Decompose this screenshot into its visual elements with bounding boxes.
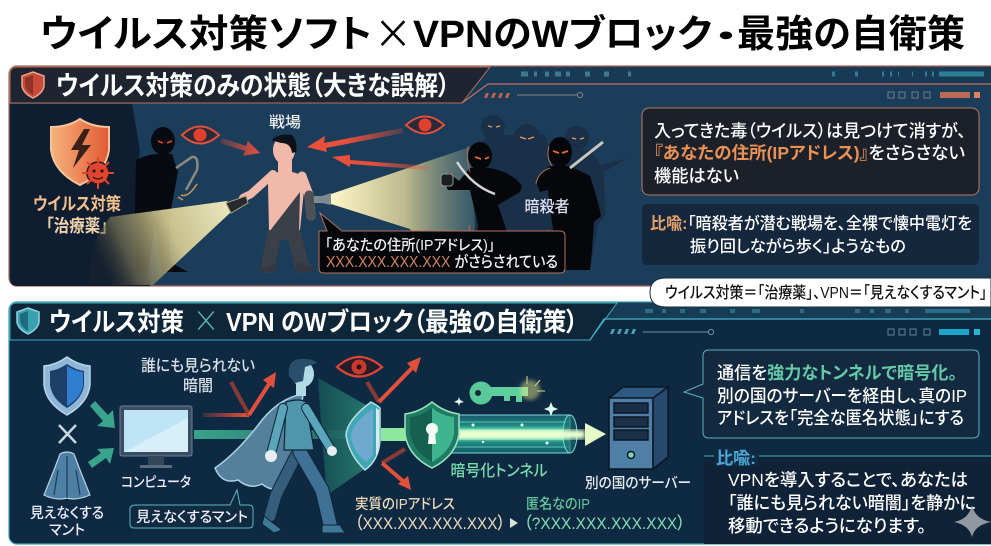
label: antivirus remedy: ウイルス対策: [33, 194, 121, 214]
flashlight left: [226, 196, 248, 213]
label: cloak callout: [130, 490, 253, 528]
text box: encryption: 別の国のサーバーを経由し、真のIP: [717, 386, 967, 406]
panel: antivirus plus VPN: [9, 297, 991, 544]
icon: keyhole shield: [405, 402, 459, 468]
panel: antivirus only: [9, 66, 991, 286]
arrows: inputs to computer: [88, 401, 115, 468]
flashlight right: [314, 193, 331, 205]
panel heading: ウイルス対策: [49, 307, 184, 337]
label: computer: コンピュータ: [121, 474, 191, 490]
icon: antivirus shield: [51, 119, 114, 189]
text box: what antivirus lacks: 『あなたの住所(IPアドレス)』をさらさない: [654, 143, 965, 163]
flashlight beam right: [331, 147, 478, 270]
text box: VPN metaphor: 「誰にも見られない暗闇」を静かに: [728, 493, 976, 513]
icon: small triangle arrow: [510, 518, 518, 528]
label: antivirus remedy: 「治療薬」: [46, 216, 108, 236]
assassin group: silhouettes: [441, 115, 628, 270]
panel heading: ×: [193, 297, 219, 341]
callout: exposed address: [319, 213, 565, 273]
icon: green key: [454, 376, 558, 416]
label: unseen darkness: 誰にも見られない: [141, 357, 255, 375]
label: encrypted tunnel: 暗号化トンネル: [450, 462, 548, 480]
panel heading: VPN のWブロック（最強の自衛策）: [226, 307, 578, 337]
panel heading: ウイルス対策のみの状態（大きな誤解）: [56, 71, 450, 101]
icon: sparkle: [954, 505, 991, 537]
label: cloak callout: 見えなくするマント: [136, 509, 248, 526]
icon: header shield: [17, 308, 39, 334]
icon: red eye right: [406, 116, 444, 134]
icon: header shield: [22, 72, 44, 98]
label: real IP address: [355, 495, 505, 533]
connection bar: [194, 430, 384, 439]
arrow: eye to person: [220, 138, 260, 156]
person: walking with cape: [262, 359, 345, 533]
text box: encryption: アドレスを「完全な匿名状態」にする: [717, 408, 964, 428]
label: anonymous IP: [524, 496, 685, 533]
text box: what antivirus lacks: [642, 108, 979, 195]
header decoration: [484, 74, 984, 98]
text box: what antivirus lacks: 入ってきた毒（ウイルス）は見つけて消すが、: [654, 121, 966, 141]
header strip: [10, 303, 991, 340]
label: unseen darkness: [141, 357, 255, 395]
icon: red eye left: [182, 126, 219, 144]
header strip: [10, 67, 991, 103]
main title: ×: [374, 2, 412, 60]
label: anonymous IP: （?XXX.XXX.XXX.XXX）: [524, 514, 685, 533]
icon: blue shield: [44, 357, 90, 415]
icon: computer: [120, 406, 192, 468]
text box: VPN metaphor: [704, 446, 991, 544]
icon: cloak: [44, 452, 90, 499]
label: unseen darkness: 暗闇: [183, 377, 213, 395]
label: antivirus remedy: [33, 194, 121, 236]
label: invisibility cloak: 見えなくする: [30, 505, 104, 522]
text box: encryption: 通信を強力なトンネルで暗号化。: [717, 363, 957, 383]
panel heading: [49, 297, 578, 341]
summary pill: [650, 278, 991, 307]
icon: red eye: [337, 357, 382, 376]
icon: cross symbol: [59, 425, 76, 443]
label: anonymous IP: 匿名なのIP: [526, 496, 590, 513]
label: real IP address: （XXX.XXX.XXX.XXX）: [355, 514, 505, 533]
main title: ウイルス対策ソフト: [40, 14, 372, 56]
arrow: red deflected top: [367, 357, 421, 402]
text box: VPN metaphor: VPNを導入することで、あなたは: [728, 470, 968, 490]
main title: 最強の自衛策: [737, 14, 965, 56]
text box: VPN metaphor: 移動できるようになります。: [728, 516, 926, 536]
label: invisibility cloak: マント: [49, 523, 85, 539]
text box: VPN metaphor: 比喩:: [716, 449, 756, 468]
text box: encryption: [684, 350, 979, 438]
green shield cone: [318, 378, 366, 495]
text box: metaphor: 振り回しながら歩く」ようなもの: [690, 236, 906, 256]
label: foreign server: 別の国のサーバー: [585, 475, 691, 492]
arrows: threats converging: [307, 128, 428, 170]
icon: translucent shield: [346, 402, 380, 470]
main title: [40, 2, 965, 60]
flashlight beam left: [89, 201, 231, 285]
icon: server: [609, 387, 668, 469]
text box: metaphor: [642, 204, 979, 265]
panel background: [9, 66, 991, 286]
main title: ・: [714, 12, 738, 56]
label: real IP address: 実質のIPアドレス: [355, 495, 455, 513]
panel background: [9, 302, 991, 544]
callout: exposed address: XXX.XXX.XXX.XXX がさらされている: [326, 252, 558, 271]
arrow: red deflected bottom: [382, 449, 411, 490]
cape: [215, 394, 303, 489]
header rule: [590, 319, 991, 340]
main title: VPNのWブロック: [413, 13, 712, 56]
text box: metaphor: 比喩:「暗殺者が潜む戦場を、全裸で懐中電灯を: [650, 213, 972, 233]
text box: what antivirus lacks: 機能はない: [654, 166, 739, 186]
dark left backdrop: [10, 104, 150, 286]
person: exposed body: [243, 135, 314, 272]
label: invisibility cloak: [30, 505, 104, 539]
header tab: [10, 67, 490, 103]
label: assassins: 暗殺者: [524, 198, 570, 216]
label: battlefield: 戦場: [269, 114, 301, 131]
arrow: red deflected left: [203, 372, 276, 417]
header tab: [10, 303, 617, 340]
header decoration: [610, 311, 980, 335]
assassin: left silhouette: [135, 127, 197, 272]
header rule: [462, 84, 991, 103]
callout: exposed address: 「あなたの住所(IPアドレス)」: [325, 237, 495, 254]
tunnel: glowing encrypted pipe: [381, 415, 606, 453]
